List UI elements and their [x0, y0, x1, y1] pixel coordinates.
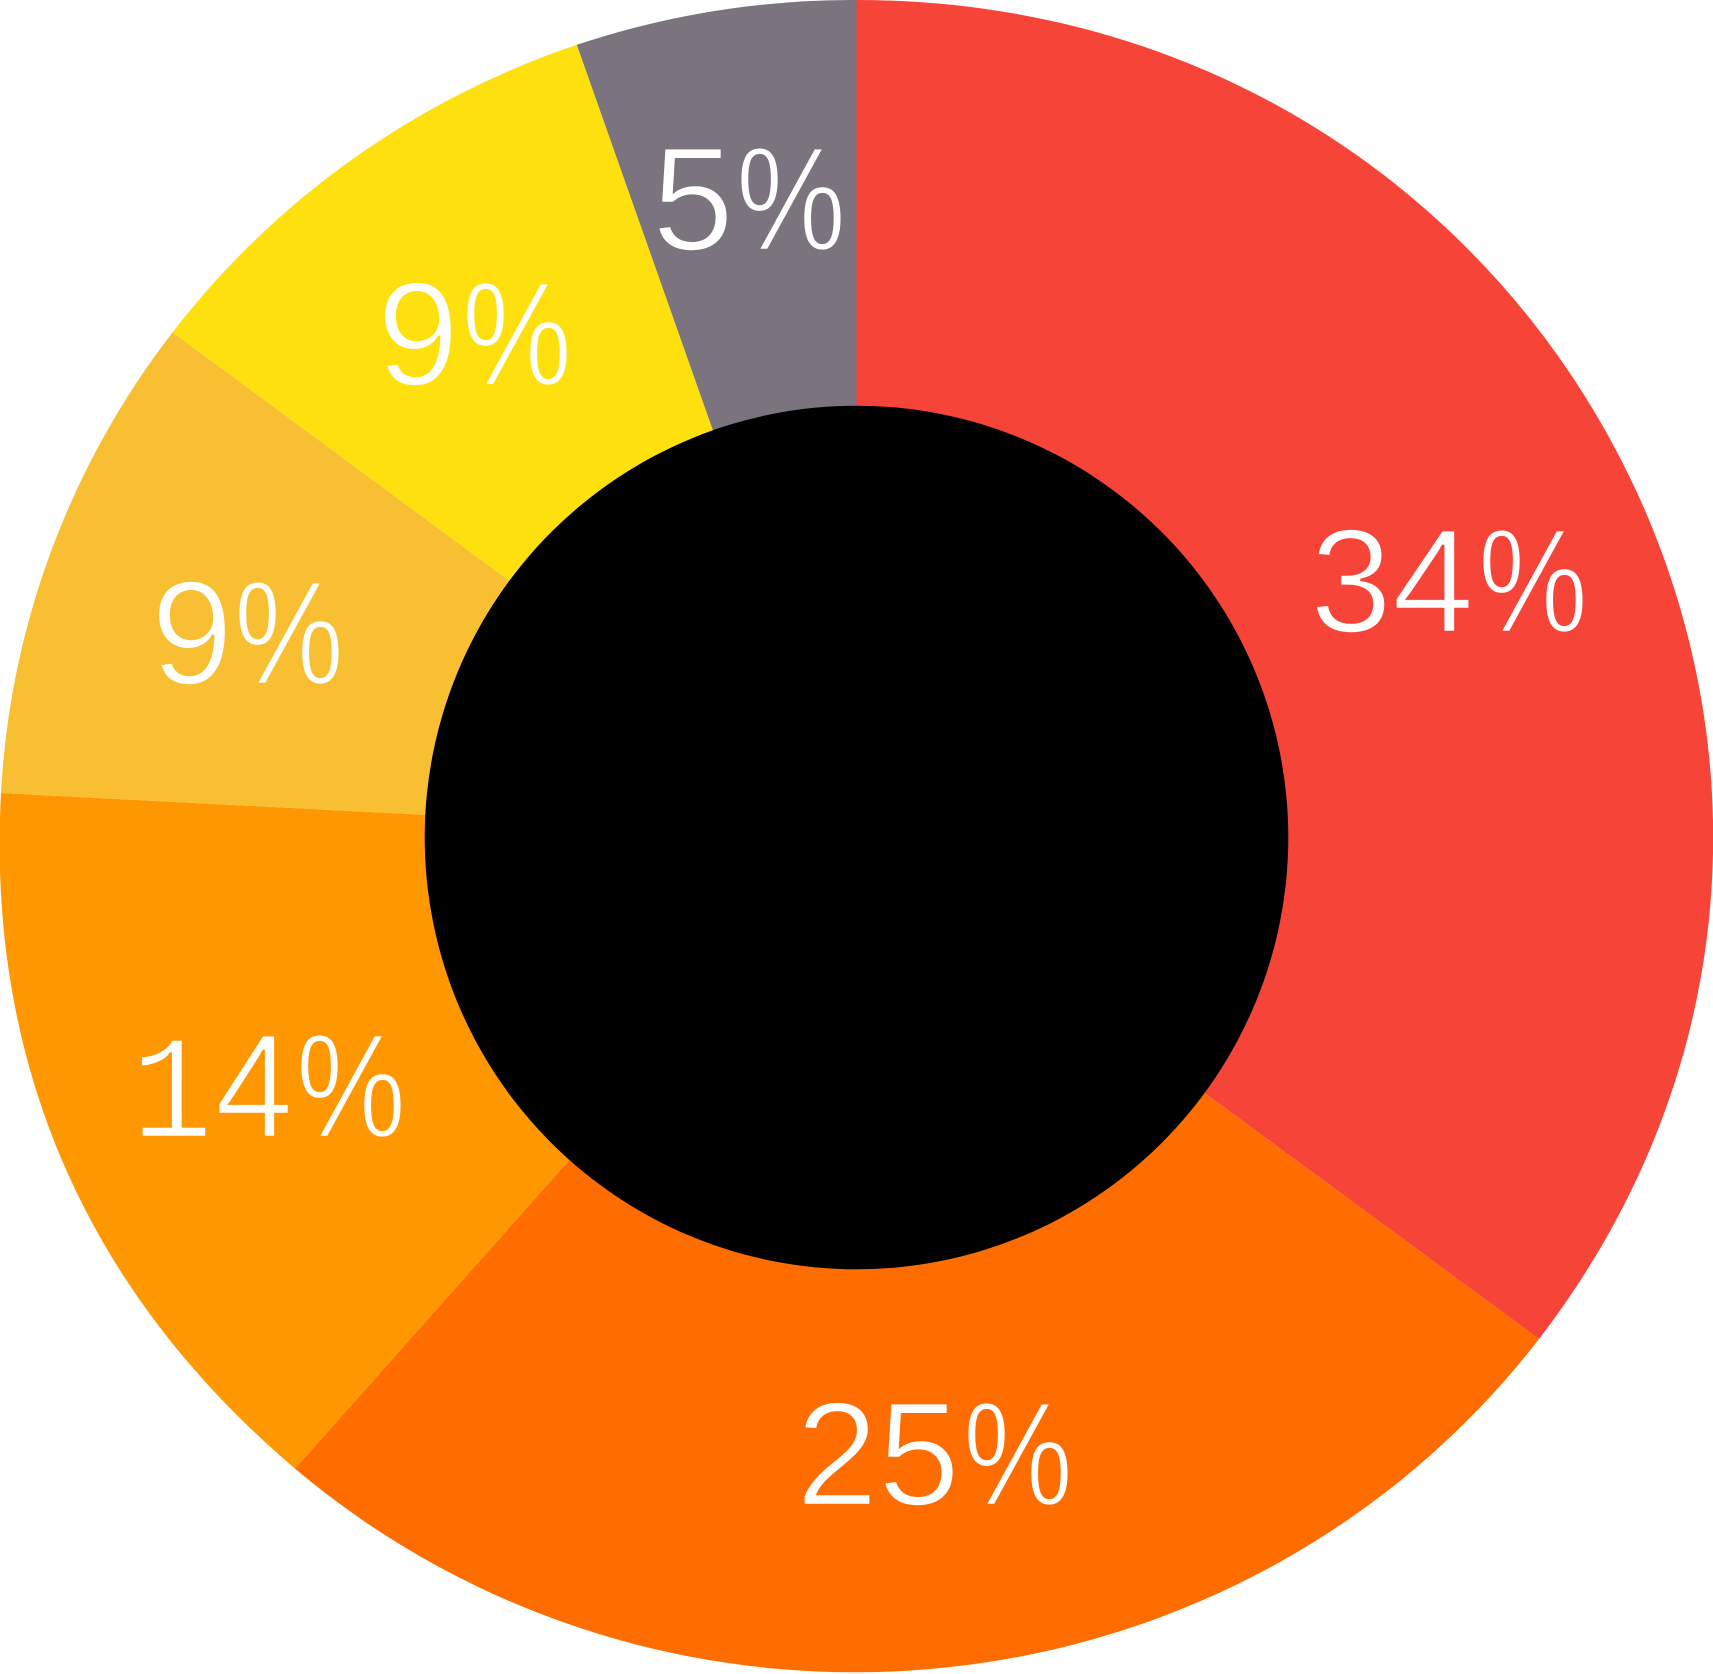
slice: 14% orange [0, 793, 856, 1469]
slice: 5% grey [577, 0, 856, 837]
label: 25%: % [963, 1372, 1073, 1537]
label: 14%: 1 [131, 1015, 213, 1182]
label: 9% amber slice: 9 [151, 551, 233, 716]
label: 14%: % [296, 1004, 406, 1169]
slice: 25% dark orange [295, 837, 1539, 1672]
label: 5%: % [736, 117, 846, 282]
label: 34%: % [1478, 499, 1588, 664]
slice: 9% yellow [173, 45, 857, 837]
label: 9% yellow slice: 9 [377, 252, 459, 417]
label: 9% amber slice: % [234, 551, 344, 716]
label: 9% yellow slice: % [462, 252, 572, 417]
label: 5%: 5 [652, 117, 734, 282]
label: 34%: 34 [1310, 499, 1474, 664]
donut centre hole [425, 406, 1288, 1269]
label: 14%: 4 [215, 1004, 293, 1169]
slice: 9% amber [1, 332, 856, 837]
label: 25%: 25 [796, 1372, 960, 1537]
slice: 34% red [856, 0, 1713, 1339]
